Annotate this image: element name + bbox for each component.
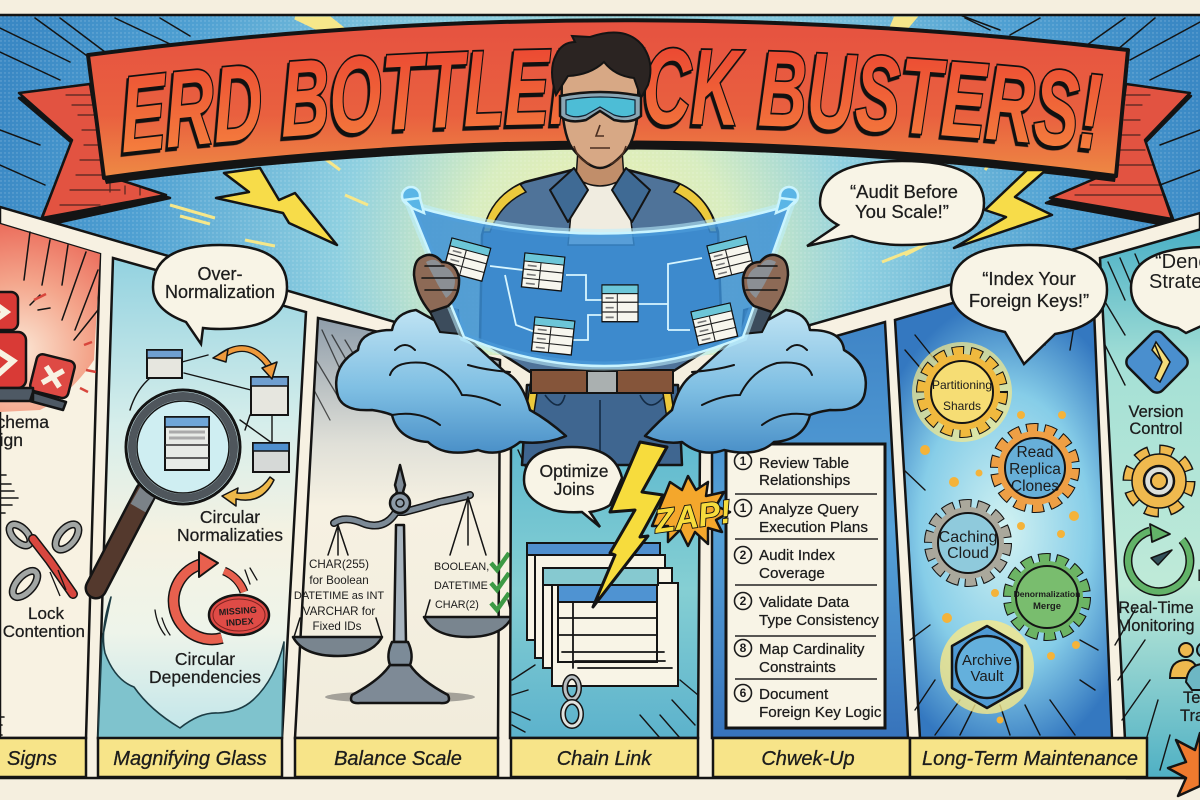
panel speed lines: [512, 445, 698, 738]
label: circular dependencies: Dependencies: [149, 667, 261, 687]
banner right tail: [1046, 84, 1191, 227]
step 5: [734, 640, 865, 676]
sheet: [410, 205, 790, 366]
panel: chain link: [510, 440, 700, 777]
scale left text: VARCHAR for: [303, 605, 375, 618]
caption: signs: Signs: [7, 748, 57, 770]
caption: long-term maintenance: [910, 738, 1147, 777]
sign bases: [0, 388, 66, 410]
scale right text: DATETIME: [434, 580, 488, 592]
step 5: Map Cardinality: [759, 641, 865, 658]
label: lock contention: Contention: [3, 622, 85, 641]
speed lines: [0, 475, 18, 735]
step 4: Validate Data: [759, 594, 850, 611]
label: version control: [1128, 403, 1184, 438]
holographic blueprint: [402, 187, 798, 366]
neck: [576, 150, 624, 186]
caption: check-up: Chwek-Up: [761, 748, 855, 770]
step 1: Review Table: [759, 455, 849, 472]
mini table: top right: [251, 377, 288, 415]
connector lines: [490, 258, 702, 340]
panel speed lines: [904, 290, 1098, 735]
icon: gear: [1128, 450, 1190, 512]
step 2: Execution Plans: [759, 519, 868, 536]
caption: long-term maintenance: Long-Term Maintenance: [922, 748, 1138, 770]
bubble: over-normalization: Over-: [198, 264, 243, 284]
caption: balance scale: [295, 738, 498, 777]
gear: read replica clones: [995, 428, 1075, 508]
label: circular normalizaties: [177, 507, 283, 545]
goggles: [560, 92, 641, 121]
icon: orange double arrow: [213, 349, 277, 379]
scale left text: [294, 558, 384, 633]
step 3: Coverage: [759, 565, 825, 582]
panel background: [712, 322, 908, 738]
caption: magnifying glass: [98, 738, 282, 777]
banner left tail: [19, 84, 170, 227]
gear: read replica clones: Clones: [1011, 478, 1059, 495]
label: circular dependencies: Circular: [175, 649, 235, 669]
step 2: [734, 500, 868, 536]
step 2: 1: [740, 501, 747, 515]
bubble: index your foreign keys: “Index Your: [982, 268, 1076, 289]
icon: curved yellow arrow: [222, 477, 274, 506]
badge: missing index: MISSING: [218, 605, 257, 617]
label: lock contention: [3, 604, 85, 641]
zap burst: [651, 476, 733, 546]
label: circular normalizaties: Circular: [200, 507, 260, 527]
bubble: audit before you scale: “Audit Before: [850, 181, 958, 202]
step 3: [734, 546, 835, 582]
zap burst: ZAP!: [651, 492, 733, 540]
gear: partitioning shards: [912, 342, 1012, 442]
checklist card: [726, 444, 885, 728]
icon: real-time monitoring dial: [1128, 524, 1190, 592]
banner underside shadow: [104, 142, 1116, 184]
icon: green check marks: [491, 553, 509, 610]
panel: balance scale: [293, 318, 512, 777]
belt: [531, 370, 673, 393]
t-shirt: [568, 182, 634, 245]
step 6: Document: [759, 686, 829, 703]
step 6: [734, 684, 882, 721]
panel background: [895, 262, 1112, 738]
label: team training: [1180, 689, 1200, 725]
lightning bolt: upper right: [954, 170, 1052, 248]
jacket: [480, 170, 722, 372]
title text: ERD BOTTLENECK BUSTERS!: [120, 46, 1104, 158]
sign: red X tile middle: [0, 332, 26, 388]
hero: sleeves: [424, 300, 778, 334]
step 3: Audit Index: [759, 547, 835, 564]
step 4: 2: [740, 594, 747, 608]
glow: [410, 205, 790, 366]
caption: magnifying glass: Magnifying Glass: [113, 748, 267, 770]
scale left text: for Boolean: [309, 574, 369, 587]
icon: chain: [563, 677, 581, 726]
bubble: audit before you scale: [807, 161, 984, 246]
scroll ends: [402, 187, 798, 213]
panel background: [1100, 228, 1200, 778]
bubble: over-normalization: [153, 245, 287, 344]
table card 1: [443, 238, 491, 281]
caption: check-up: [713, 738, 910, 777]
banner main ribbon: [88, 20, 1128, 178]
panel speed lines: [1104, 254, 1170, 770]
step 6: 6: [740, 686, 747, 700]
label: real-time monitoring: Real-Time: [1118, 599, 1194, 617]
face: [562, 50, 638, 168]
table card 6: [691, 303, 738, 345]
step 2: Analyze Query: [759, 501, 859, 518]
bubble: denormalize strategically: [1131, 247, 1200, 333]
panel background: [0, 224, 100, 738]
scale left text: CHAR(255): [309, 558, 369, 571]
gear: caching cloud: Caching: [939, 529, 997, 546]
legs: [522, 385, 682, 465]
label: real-time monitoring: Monitoring: [1117, 617, 1195, 635]
icon: stacked tables: [527, 543, 678, 686]
table card 2: [521, 253, 565, 291]
step 6: Foreign Key Logic: [759, 704, 882, 721]
caption: chain link: Chain Link: [557, 748, 652, 770]
step 3: 2: [740, 548, 747, 562]
scale left text: DATETIME as INT: [294, 590, 384, 602]
caption: balance scale: Balance Scale: [334, 748, 462, 770]
panel: warning signs: [0, 224, 100, 777]
icon: version control diamond: [1123, 328, 1191, 396]
gear: denormalization merge: Denormalization: [1014, 589, 1080, 599]
bubble: optimize joins: Optimize: [539, 461, 609, 481]
scale right text: BOOLEAN,: [434, 561, 489, 573]
scale right text: CHAR(2): [435, 599, 479, 611]
icon: balance scale: [293, 465, 512, 703]
table card 4: [531, 317, 575, 355]
panel background: [98, 258, 306, 738]
scale left text: Fixed IDs: [313, 620, 362, 633]
label: real-time monitoring: [1117, 599, 1195, 635]
hero: right hand: [743, 255, 788, 312]
label: version control: Version: [1128, 403, 1184, 421]
panel: team tools: [1100, 228, 1200, 796]
badge: missing index: INDEX: [226, 616, 254, 628]
icon: circular arrow: [155, 552, 257, 639]
bubble: index your foreign keys: Foreign Keys!”: [969, 290, 1089, 311]
icon: team: [1170, 643, 1200, 690]
panel: magnifying glass: [96, 258, 306, 777]
icon: broken chain: [6, 520, 83, 601]
mini table: lower right: [253, 443, 289, 472]
sparks: [920, 395, 1080, 724]
bubble: index your foreign keys: [951, 245, 1107, 364]
gear: caching cloud: [929, 504, 1007, 582]
step 1: Relationships: [759, 472, 851, 489]
gear: archive vault: Archive: [962, 652, 1012, 669]
mouth and nose: [574, 125, 626, 164]
panel: long-term maintenance: [895, 262, 1147, 777]
bubble: optimize joins: [524, 447, 622, 527]
gear: caching cloud: Cloud: [947, 545, 989, 562]
sign: red X tile right: [29, 353, 76, 399]
bubble: audit before you scale: You Scale!”: [855, 201, 949, 222]
hair: [552, 32, 650, 98]
icon: orange burst: [1168, 733, 1200, 796]
label: circular dependencies: [149, 649, 261, 687]
lightning bolt: main: [593, 442, 667, 607]
gear: denormalization merge: [1008, 558, 1086, 636]
label: version control: Control: [1129, 420, 1183, 438]
top hatch: [314, 330, 368, 420]
collars: [550, 168, 650, 222]
step 1: [734, 452, 851, 489]
caption: signs: [0, 738, 86, 777]
sign: red X tile top: [0, 292, 18, 330]
gear: read replica clones: Replica: [1009, 461, 1061, 478]
hero: left hand: [414, 255, 459, 312]
gear: partitioning shards: Shards: [943, 399, 981, 413]
step 1: 1: [740, 454, 747, 468]
hero: torso: [480, 150, 722, 465]
caption: chain link: [511, 738, 698, 777]
gear: archive vault: [940, 620, 1034, 714]
table card 5: [707, 236, 754, 279]
step 5: Constraints: [759, 659, 836, 676]
gear: partitioning shards: Partitioning: [932, 378, 992, 392]
bubble: optimize joins: Joins: [554, 479, 595, 499]
step 4: Type Consistency: [759, 612, 879, 629]
cloud: left: [336, 310, 566, 453]
label: schema design: [0, 412, 49, 450]
lightning bolt: upper left: [216, 168, 337, 245]
gear: read replica clones: Read: [1016, 444, 1054, 461]
gear: archive vault: Vault: [970, 668, 1004, 685]
table card 3: [602, 285, 638, 322]
bubble: over-normalization: Normalization: [165, 282, 275, 302]
red burst: [0, 224, 100, 412]
cloud: right: [645, 310, 866, 453]
title banner: [18, 18, 1200, 267]
relationship arrows: [130, 355, 272, 462]
gear: denormalization merge: Merge: [1033, 601, 1061, 612]
cloud border: [98, 597, 284, 738]
background: sky with burst: [0, 15, 1200, 355]
panel: check-up: [712, 322, 910, 777]
hero: head: [552, 32, 650, 168]
scale right text: [434, 561, 489, 611]
step 5: 8: [740, 641, 747, 655]
badge: missing index: [209, 595, 269, 635]
label: lock contention: Lock: [28, 604, 64, 623]
panel background: [295, 318, 500, 738]
panel background: [510, 440, 700, 738]
step 4: [734, 592, 879, 629]
roof gutter band: [0, 207, 1200, 778]
label: circular normalizaties: Normalizaties: [177, 525, 283, 545]
mini table: top left: [147, 350, 182, 378]
icon: magnifying glass: [96, 390, 240, 588]
